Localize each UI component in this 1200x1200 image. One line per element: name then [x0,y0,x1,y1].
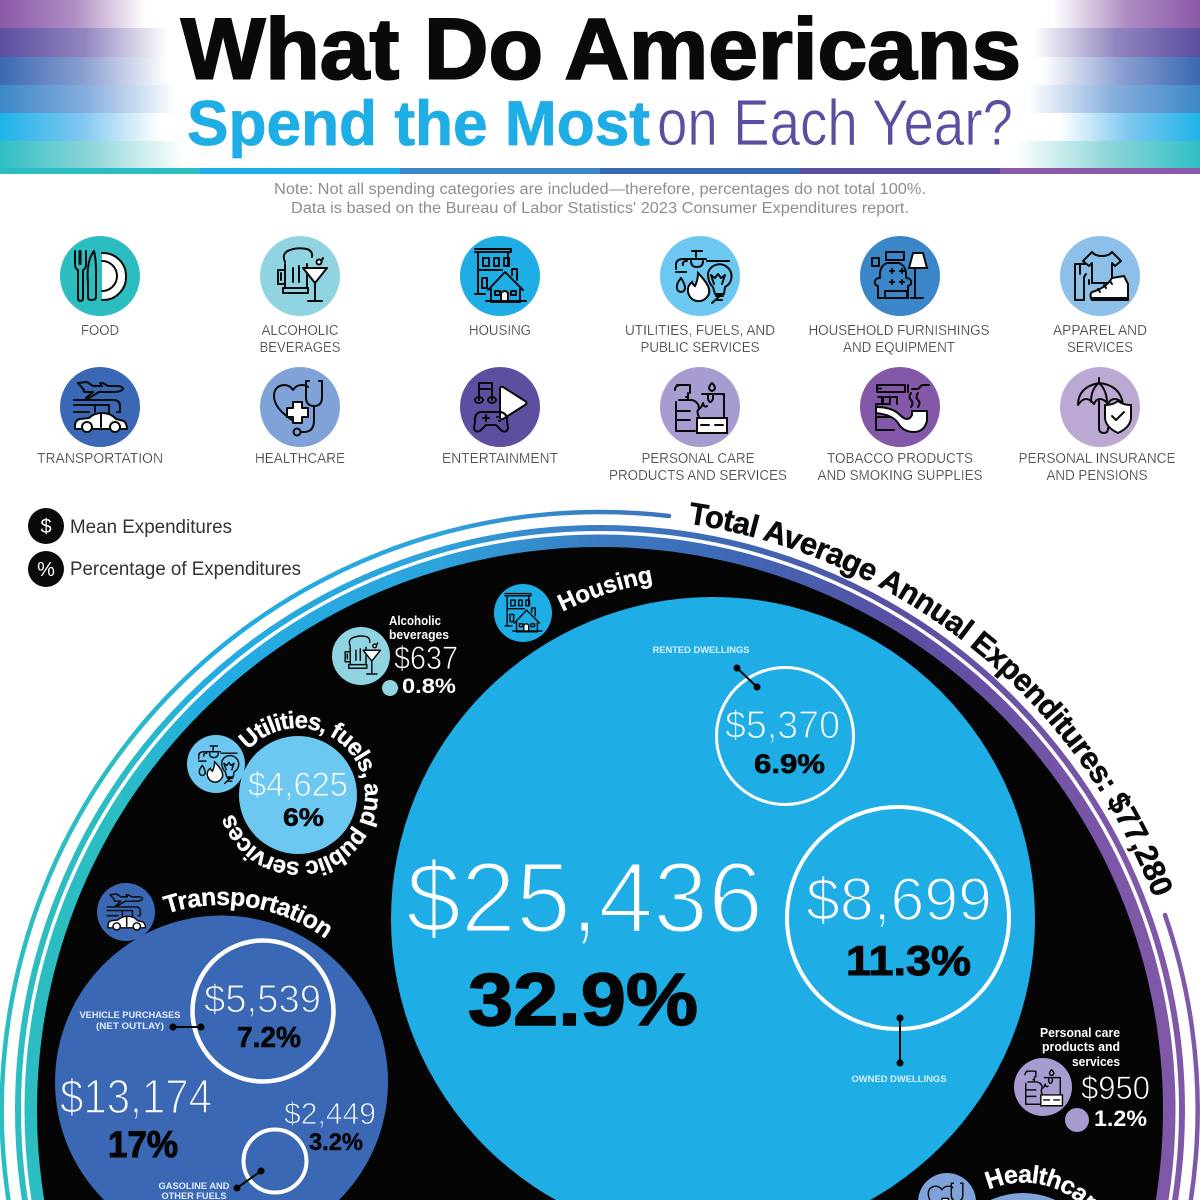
housing value: $25,436 [406,842,763,954]
key: tobacco: TOBACCO PRODUCTS [827,451,973,467]
key: personal care [609,367,787,484]
key: healthcare: HEALTHCARE [255,451,345,467]
key: apparel: APPAREL AND [1053,323,1147,339]
panel: personal care [1014,1026,1150,1132]
key: housing [460,236,540,339]
gasoline and other fuels [158,1096,376,1200]
title line 2 regular: on Each Year? [657,86,1013,159]
header colour bands [0,0,1200,174]
alcohol label: Alcoholic [389,614,441,628]
alcohol label [389,614,449,642]
note [274,181,926,217]
panel: transportation [55,883,388,1200]
panel: utilities [187,710,378,876]
transportation value: $13,174 [60,1071,212,1124]
key: food: FOOD [81,323,119,339]
panel: healthcare [918,1165,1096,1200]
key: entertainment [442,367,558,467]
note: Note: Not all spending categories are included—therefore, percentages do not total 100%. [274,181,926,198]
key: personal care: PERSONAL CARE [642,451,755,467]
utilities icon [187,735,245,793]
note: Data is based on the Bureau of Labor Statistics' 2023 Consumer Expenditures report. [291,200,909,217]
key: transportation: TRANSPORTATION [37,451,163,467]
key: personal insurance: AND PENSIONS [1046,468,1148,484]
alcohol percent: 0.8% [402,675,456,698]
legend: mean expenditures: $ [40,516,52,538]
transportation icon [97,883,155,941]
vehicle purchases [80,940,334,1082]
black chart disc [37,547,1163,1200]
key: personal care: PRODUCTS AND SERVICES [609,468,787,484]
alcohol icon [332,627,390,685]
personal care label: Personal care [1040,1026,1120,1040]
healthcare icon [918,1173,976,1200]
legend: percentage of expenditures [28,551,301,587]
key: tobacco: AND SMOKING SUPPLIES [818,468,982,484]
panel: housing [391,570,1035,1200]
personal care icon [1014,1058,1072,1116]
alcohol label: beverages [389,628,449,642]
gasoline and other fuels: $2,449 [284,1096,376,1131]
personal care label [1040,1026,1120,1069]
housing disc [391,597,1035,1200]
key: alcoholic beverages: BEVERAGES [260,340,340,356]
owned dwellings [787,807,1009,1085]
gasoline and other fuels: GASOLINE AND [158,1181,230,1192]
transportation percent: 17% [108,1124,178,1165]
key: apparel [1053,236,1147,356]
key: healthcare [255,367,345,467]
utilities value: $4,625 [248,766,348,804]
key: household furnishings [808,236,990,356]
title line 2 bold: Spend the Most [187,89,650,159]
icon key: categories [37,236,1176,484]
legend: percentage of expenditures: Percentage of Expenditures [70,558,301,580]
key: food [60,236,140,339]
key: utilities: PUBLIC SERVICES [640,340,760,356]
vehicle purchases: (NET OUTLAY) [96,1021,164,1032]
housing heading: Housing [556,570,652,612]
key: housing: HOUSING [469,323,531,339]
owned dwellings: OWNED DWELLINGS [852,1074,946,1085]
vehicle purchases: VEHICLE PURCHASES [80,1010,180,1021]
rented dwellings: $5,370 [725,704,840,747]
vehicle purchases: $5,539 [204,978,321,1021]
transportation disc [55,916,388,1200]
utilities heading: Utilities, fuels, and public services [222,710,378,876]
key: personal insurance [1018,367,1176,484]
alcohol value: $637 [394,640,458,676]
total label: Total Average Annual Expenditures: $77,280 [690,502,1172,895]
key: household furnishings: AND EQUIPMENT [843,340,955,356]
utilities percent: 6% [283,804,324,832]
key: entertainment: ENTERTAINMENT [442,451,558,467]
legend: mean expenditures [28,508,232,544]
key: alcoholic beverages [260,236,340,356]
key: personal insurance: PERSONAL INSURANCE [1018,451,1176,467]
personal care label: products and [1042,1040,1120,1054]
healthcare disc [945,1193,1101,1200]
utilities disc [239,736,357,854]
rented dwellings [652,645,854,804]
key: utilities [625,236,775,356]
housing percent: 32.9% [468,958,698,1041]
rented dwellings: 6.9% [754,749,825,779]
personal care value: $950 [1081,1070,1150,1106]
owned dwellings: 11.3% [846,937,971,984]
legend: mean expenditures: Mean Expenditures [70,516,232,538]
key: transportation [37,367,163,467]
title line 1: What Do Americans [181,2,1021,98]
housing icon [494,584,552,642]
transportation heading: Transportation [162,892,331,938]
personal care percent: 1.2% [1094,1106,1147,1131]
title [181,2,1021,159]
gasoline and other fuels: 3.2% [309,1129,363,1156]
owned dwellings: $8,699 [806,866,992,933]
key: utilities: UTILITIES, FUELS, AND [625,323,775,339]
panel: alcoholic beverages [332,614,458,698]
key: apparel: SERVICES [1067,340,1133,356]
key: tobacco [818,367,982,484]
personal care label: services [1072,1055,1120,1069]
vehicle purchases: 7.2% [237,1022,301,1054]
legend [28,508,301,587]
key: household furnishings: HOUSEHOLD FURNISHINGS [808,323,990,339]
legend: percentage of expenditures: % [37,559,55,581]
outer rings [2,512,1198,1200]
rented dwellings: RENTED DWELLINGS [652,645,750,656]
key: alcoholic beverages: ALCOHOLIC [262,323,338,339]
